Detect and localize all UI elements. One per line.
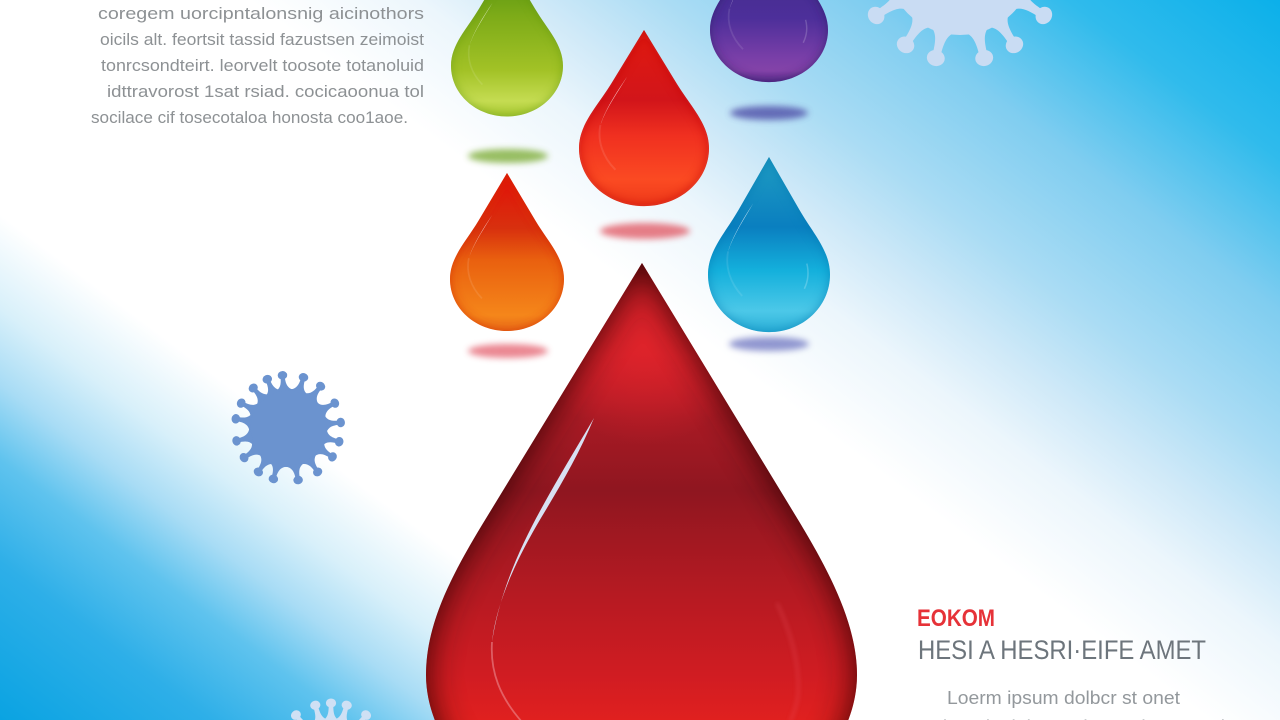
icon: virus middle left <box>230 370 346 486</box>
text block: top left paragraph: socilace cif tosecotaloa honosta coo1aoe. <box>91 108 408 127</box>
drop: green <box>451 0 563 116</box>
text block: top left paragraph: coregem uorcipntalonsnig aicinothors <box>98 4 424 23</box>
drop: blue <box>708 157 830 332</box>
text block: bottom right heading <box>900 605 1225 720</box>
icon: virus top right <box>863 0 1057 69</box>
label: grey heading: HESI A HESRI·EIFE AMET <box>918 635 1206 665</box>
text block: top left paragraph: oicils alt. feortsit tassid fazustsen zeimoist <box>100 30 424 49</box>
highlight: large drop crescent <box>492 418 594 642</box>
shadow: orange drop <box>468 344 548 358</box>
text block: top left paragraph: idttravorost 1sat rsiad. cocicaoonua tol <box>107 82 424 101</box>
drop: orange <box>450 173 564 331</box>
drop: red <box>579 30 709 206</box>
drop: purple <box>710 0 828 82</box>
body text line: Loerm ipsum dolbcr st onet <box>947 688 1180 708</box>
label: red heading: EOKOM <box>917 605 995 632</box>
shadow: red drop <box>600 223 690 239</box>
shadow: purple drop <box>730 106 808 120</box>
drop: large dark red <box>426 250 857 720</box>
highlight: large drop lower arc <box>492 642 522 720</box>
icon: virus bottom <box>288 698 374 720</box>
shadow: green drop <box>468 149 548 163</box>
shadow: blue drop <box>729 337 809 351</box>
text block: top left paragraph: tonrcsondteirt. leorvelt toosote totanoluid <box>101 56 424 75</box>
text block: top left paragraph <box>91 4 424 127</box>
